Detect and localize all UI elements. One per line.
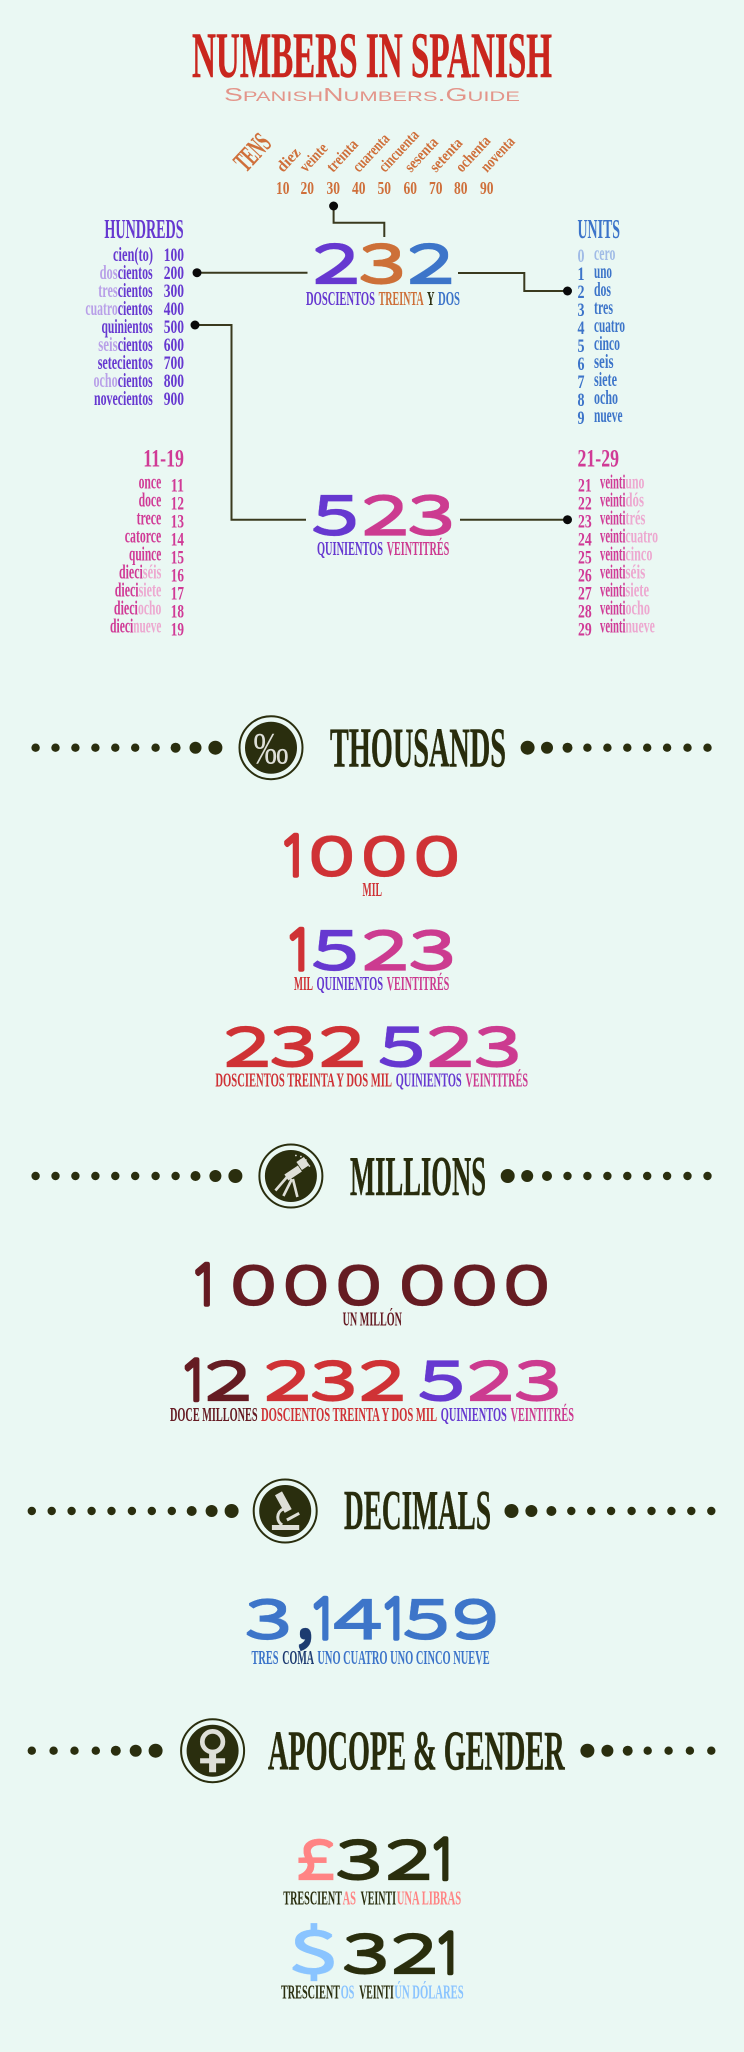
connector: hundreds to 523 <box>190 320 306 520</box>
text: VEINTITRÉS <box>387 537 449 560</box>
big number 1523: 5 <box>311 906 360 986</box>
big number pounds 321 <box>294 1816 460 1895</box>
big number 1 000 000: 0 <box>334 1242 383 1320</box>
11-19 numbers <box>171 476 184 640</box>
hundreds numbers <box>164 245 184 410</box>
big number 1000: 0 <box>412 812 461 892</box>
big number 3,14159: 9 <box>451 1576 500 1654</box>
21-29 words: trés <box>625 508 645 530</box>
tens numbers: 20 <box>300 178 314 198</box>
units digits: 7 <box>578 372 585 393</box>
hundreds words: cientos <box>118 262 153 284</box>
caption 12 232 523: DOSCIENTOS TREINTA Y DOS MIL <box>261 1404 437 1426</box>
hundreds numbers: 300 <box>164 281 184 302</box>
big number 232 523 <box>223 1003 522 1082</box>
units words: nueve <box>594 405 623 427</box>
subtitle: S PANISH N UMBERS .G UIDE <box>224 85 520 105</box>
11-19 words: doce <box>139 490 161 512</box>
hundreds words: tres <box>98 280 118 302</box>
icon: microscope <box>254 1480 317 1542</box>
big number 3,14159: 5 <box>402 1576 451 1654</box>
units words: cuatro <box>594 315 625 337</box>
hundreds words: cuatro <box>85 298 118 320</box>
text: UN MILLÓN <box>343 1307 402 1331</box>
big number 1 000 000: 0 <box>450 1242 499 1320</box>
tens numbers: 50 <box>378 178 391 198</box>
hundreds words <box>85 244 153 410</box>
hundreds numbers: 900 <box>164 389 184 410</box>
11-19 words: siete <box>139 580 161 602</box>
caption dollars 321: VEINTI <box>359 1982 394 2004</box>
11-19 words: nueve <box>133 616 161 638</box>
big number 232 523: 3 <box>474 1003 522 1082</box>
tens numbers: 70 <box>429 178 442 198</box>
11-19 words: catorce <box>125 526 161 548</box>
hundreds words: setecientos <box>98 352 153 374</box>
21-29 words: veinti <box>600 616 626 638</box>
connector: 523 to 21-29 <box>460 515 572 524</box>
units words: cinco <box>594 333 620 355</box>
hundreds words: cientos <box>118 298 153 320</box>
big number 1523 <box>283 906 457 986</box>
11-19 words <box>110 472 161 638</box>
text: VEINTITRÉS <box>387 972 449 995</box>
big number 1000: 0 <box>307 812 356 892</box>
panel: 21-29 <box>578 446 658 640</box>
21-29 words <box>600 472 658 638</box>
big number 232 523: 3 <box>269 1003 318 1082</box>
big number 232 523: 2 <box>318 1003 367 1082</box>
big number pounds 321: 3 <box>335 1816 384 1895</box>
hundreds words: seis <box>98 334 118 356</box>
big number 232 523: 5 <box>378 1003 426 1082</box>
panel: 11-19 <box>110 446 184 640</box>
tens numbers <box>276 178 494 198</box>
units heading: UNITS <box>578 214 620 244</box>
21-29 words: nueve <box>625 616 655 638</box>
dots right <box>521 741 712 755</box>
tens heading: TENS <box>228 127 278 178</box>
caption pounds 321: AS <box>343 1888 356 1910</box>
big number 12 232 523: 2 <box>263 1337 312 1416</box>
big number 523: 2 <box>361 472 410 550</box>
21-29 words: veinti <box>600 580 626 602</box>
big number 3,14159: 1 <box>378 1592 411 1646</box>
tens numbers: 40 <box>352 178 366 198</box>
11-19 words: dieci <box>114 598 138 620</box>
big number 3,14159: 1 <box>307 1592 340 1646</box>
big number 12 232 523: 1 <box>178 1354 211 1408</box>
21-29 words: ocho <box>625 598 650 620</box>
21-29 words: uno <box>625 472 644 494</box>
big number 1 000 000: 0 <box>502 1242 551 1320</box>
units digits: 1 <box>578 264 584 285</box>
tens words: sesenta <box>401 134 442 176</box>
hundreds numbers: 200 <box>164 263 184 284</box>
section header: millions <box>31 1144 712 1208</box>
hundreds words: cientos <box>118 370 153 392</box>
11-19 words: ocho <box>138 598 161 620</box>
units digits: 2 <box>578 282 584 303</box>
11-19 words: once <box>139 472 161 494</box>
big number 12 232 523: 3 <box>514 1337 562 1416</box>
dots right <box>580 1744 716 1758</box>
11-19 numbers: 15 <box>171 548 184 568</box>
caption pounds 321: TRESCIENT <box>283 1888 342 1910</box>
tens words: veinte <box>296 140 331 176</box>
caption 232: Y <box>427 288 435 310</box>
hundreds numbers: 800 <box>164 371 184 392</box>
big number dollars 321: 1 <box>432 1927 465 1981</box>
21-29 words: cuatro <box>625 526 658 548</box>
21-29 numbers: 22 <box>578 494 592 514</box>
21-29 words: veinti <box>600 508 626 530</box>
21-29 numbers: 27 <box>578 584 592 604</box>
caption pounds 321 <box>283 1888 461 1910</box>
units digits: 6 <box>578 354 584 375</box>
units digits: 8 <box>578 390 584 411</box>
section header: millions: MILLIONS <box>350 1146 486 1208</box>
11-19 words: séis <box>143 562 161 584</box>
11-19 words: trece <box>137 508 161 530</box>
big number pounds 321: 2 <box>384 1816 434 1895</box>
connector: tens to 232 <box>329 202 384 237</box>
section header: decimals <box>28 1480 716 1542</box>
connector: 232 to units <box>458 273 572 296</box>
big number 1523: 1 <box>283 924 316 978</box>
caption dollars 321: TRESCIENT <box>281 1982 340 2004</box>
big number 232 523: 2 <box>223 1003 272 1082</box>
big number 12 232 523: 5 <box>417 1337 466 1416</box>
big number 1523: 3 <box>408 906 457 986</box>
big number 3,14159 <box>244 1576 500 1654</box>
tens numbers: 10 <box>276 178 290 198</box>
big number pounds 321: 1 <box>427 1833 460 1887</box>
dots left <box>31 1169 242 1183</box>
panel: units <box>578 214 625 429</box>
big number 523: 3 <box>407 472 456 550</box>
21-29 numbers: 29 <box>578 620 592 640</box>
11-19 words: dieci <box>110 616 134 638</box>
panel: tens <box>228 127 519 198</box>
units words: siete <box>594 369 617 391</box>
caption 3,14159: COMA <box>282 1647 314 1669</box>
units digits: 9 <box>578 408 584 429</box>
big number dollars 321: 2 <box>390 1910 439 1989</box>
big number 232 523: 2 <box>426 1003 475 1082</box>
caption 12 232 523: VEINTITRÉS <box>511 1403 574 1426</box>
caption dollars 321: OS <box>341 1982 354 2004</box>
big number 3,14159: 4 <box>332 1576 384 1654</box>
caption 232: DOSCIENTOS <box>306 288 375 310</box>
big number 232: 2 <box>406 220 456 299</box>
11-19 numbers: 12 <box>171 494 184 514</box>
11-19 numbers: 11 <box>171 476 184 496</box>
21-29 words: veinti <box>600 562 626 584</box>
big number 1 000 000: 0 <box>282 1242 330 1320</box>
21-29 numbers: 21 <box>578 476 592 496</box>
tens numbers: 80 <box>454 178 468 198</box>
caption pounds 321: UNA LIBRAS <box>397 1888 461 1910</box>
caption 232: TREINTA <box>379 288 424 310</box>
big number 1 000 000 <box>189 1242 551 1320</box>
big number 1000 <box>278 812 461 892</box>
caption 232 523: QUINIENTOS <box>396 1070 462 1092</box>
units digits: 0 <box>578 246 584 267</box>
21-29 words: dós <box>625 490 644 512</box>
big number 1 000 000: 0 <box>229 1242 278 1320</box>
21-29 words: cinco <box>625 544 652 566</box>
icon: venus <box>181 1719 244 1782</box>
hundreds words: cien(to) <box>113 244 153 266</box>
units words: uno <box>594 261 612 283</box>
11-19 numbers: 14 <box>171 530 184 550</box>
dots left <box>31 741 222 755</box>
hundreds numbers: 700 <box>164 353 184 374</box>
21-29 numbers: 28 <box>578 602 592 622</box>
connector: hundreds to 232 <box>192 268 308 277</box>
21-29 words: veinti <box>600 598 626 620</box>
tens words: cincuenta <box>375 127 423 176</box>
11-19 numbers: 19 <box>171 620 184 640</box>
11-19 numbers: 17 <box>171 584 184 604</box>
caption 12 232 523: DOCE MILLONES <box>170 1404 258 1426</box>
big number pounds 321: £ <box>294 1816 337 1895</box>
21-29 words: veinti <box>600 544 626 566</box>
section header: thousands <box>31 716 712 780</box>
icon: per mille: ‰ <box>254 724 288 773</box>
hundreds words: ocho <box>94 370 118 392</box>
hundreds numbers: 600 <box>164 335 184 356</box>
big number 12 232 523: 2 <box>358 1337 407 1416</box>
hundreds words: cientos <box>118 280 153 302</box>
tens words: ochenta <box>452 133 494 176</box>
caption 232 523: DOSCIENTOS TREINTA Y DOS MIL <box>215 1070 392 1092</box>
tens words: cuarenta <box>349 130 393 176</box>
big number 232: 3 <box>358 220 407 299</box>
dots right <box>501 1169 712 1183</box>
21-29 numbers: 24 <box>578 530 592 550</box>
units words: seis <box>594 351 614 373</box>
caption 1523: MIL <box>294 973 313 995</box>
big number 3,14159: , <box>296 1576 314 1654</box>
tens numbers: 90 <box>480 178 494 198</box>
units digits <box>578 246 585 429</box>
big number 12 232 523: 2 <box>466 1337 515 1416</box>
dots left <box>28 1504 239 1518</box>
21-29 words: siete <box>625 580 649 602</box>
11-19 words: dieci <box>119 562 143 584</box>
big number 523: 5 <box>311 472 360 550</box>
tens words: noventa <box>477 133 519 176</box>
units digits: 5 <box>578 336 584 357</box>
tens words: treinta <box>323 136 362 176</box>
text: MIL <box>362 879 382 901</box>
units words: ocho <box>594 387 618 409</box>
caption dollars 321: ÚN DÓLARES <box>394 1980 464 2004</box>
21-29 numbers: 25 <box>578 548 592 568</box>
units words: tres <box>594 297 613 319</box>
hundreds numbers: 400 <box>164 299 184 320</box>
tens numbers: 30 <box>326 178 340 198</box>
units digits: 3 <box>578 300 584 321</box>
section header: decimals: DECIMALS <box>344 1480 491 1542</box>
21-29 words: veinti <box>600 472 626 494</box>
caption 1523: QUINIENTOS <box>316 973 383 995</box>
big number 523 <box>311 472 456 550</box>
21-29 heading: 21-29 <box>578 446 619 473</box>
units digits: 4 <box>578 318 585 339</box>
big number 1000: 0 <box>360 812 409 892</box>
11-19 heading: 11-19 <box>143 446 184 473</box>
hundreds words: quinientos <box>102 316 153 338</box>
icon: per mille <box>240 716 302 779</box>
big number 232: 2 <box>312 220 361 299</box>
big number 232 <box>312 220 456 299</box>
icon: telescope <box>259 1144 322 1208</box>
caption dollars 321 <box>281 1980 464 2004</box>
11-19 words: dieci <box>115 580 139 602</box>
caption 12 232 523 <box>170 1403 574 1426</box>
big number 1000: 1 <box>278 830 311 884</box>
heading: thousands: THOUSANDS <box>330 718 506 780</box>
big number 1 000 000: 1 <box>189 1258 222 1312</box>
11-19 words: quince <box>129 544 161 566</box>
text: VEINTITRÉS <box>466 1069 528 1092</box>
21-29 words: séis <box>625 562 645 584</box>
dots left <box>28 1744 163 1758</box>
units words: cero <box>594 243 615 265</box>
panel: hundreds <box>85 214 184 410</box>
11-19 numbers: 18 <box>171 602 184 622</box>
tens numbers: 60 <box>404 178 417 198</box>
caption 3,14159: UNO CUATRO UNO CINCO NUEVE <box>317 1647 490 1669</box>
big number 12 232 523: 3 <box>310 1337 358 1416</box>
21-29 words: veinti <box>600 490 626 512</box>
tens words <box>273 127 519 176</box>
hundreds words: cientos <box>118 334 153 356</box>
hundreds numbers: 100 <box>164 245 184 266</box>
21-29 numbers: 26 <box>578 566 592 586</box>
dots right <box>504 1504 716 1518</box>
big number 1 000 000: 0 <box>398 1242 447 1320</box>
units words <box>594 243 625 427</box>
tens words: diez <box>273 144 304 176</box>
section header: apocope and gender <box>28 1719 716 1782</box>
21-29 words: veinti <box>600 526 626 548</box>
big number dollars 321: $ <box>287 1906 340 1990</box>
big number 3,14159: 3 <box>244 1576 293 1654</box>
hundreds words: novecientos <box>94 388 153 410</box>
hundreds words: dos <box>100 262 118 284</box>
21-29 numbers: 23 <box>578 512 592 532</box>
caption pounds 321: VEINTI <box>361 1888 396 1910</box>
11-19 numbers: 13 <box>171 512 184 532</box>
hundreds numbers: 500 <box>164 317 184 338</box>
big number dollars 321 <box>287 1906 465 1990</box>
caption 232: DOS <box>438 288 460 310</box>
big number 1523: 2 <box>361 906 410 986</box>
hundreds heading: HUNDREDS <box>104 214 184 244</box>
big number 12 232 523: 2 <box>204 1337 253 1416</box>
big number 12 232 523 <box>178 1337 562 1416</box>
big number dollars 321: 3 <box>342 1910 390 1989</box>
units words: dos <box>594 279 611 301</box>
caption 12 232 523: QUINIENTOS <box>441 1404 507 1426</box>
caption 3,14159 <box>252 1647 490 1669</box>
tens words: setenta <box>426 135 466 176</box>
11-19 numbers: 16 <box>171 566 184 586</box>
caption 523: QUINIENTOS <box>317 538 383 560</box>
21-29 numbers <box>578 476 592 640</box>
caption 3,14159: TRES <box>252 1647 278 1669</box>
